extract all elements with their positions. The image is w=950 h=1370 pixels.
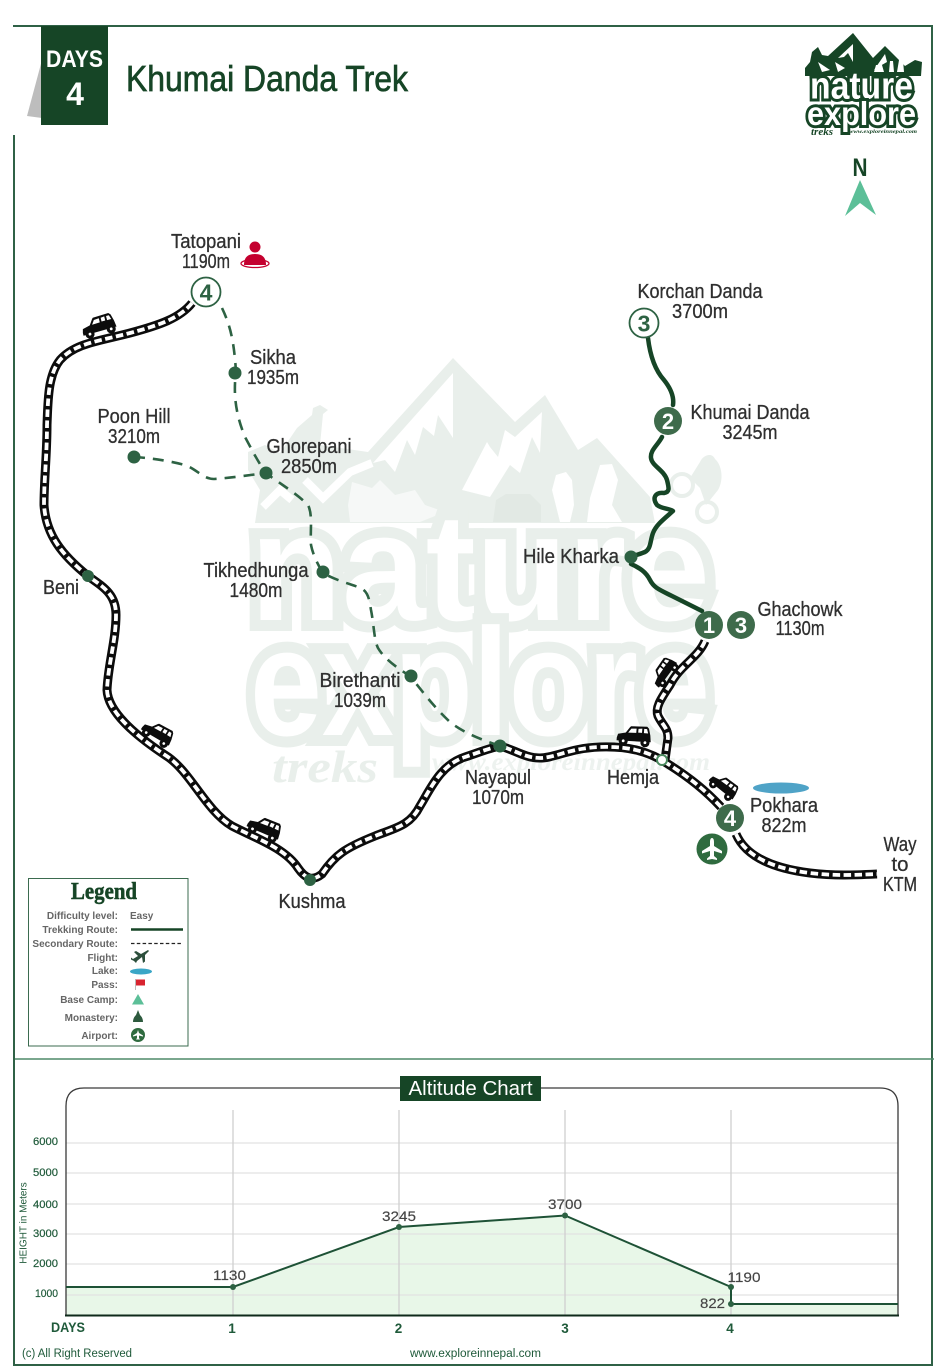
- y axis labels: 4000: [33, 1199, 58, 1211]
- x axis labels: 2: [395, 1321, 402, 1336]
- logo: nature explore treks: explore: [807, 95, 916, 132]
- place labels: KTM: [883, 874, 917, 896]
- place labels: 3245m: [722, 422, 778, 444]
- place labels: Sikha: [250, 347, 297, 369]
- value labels: 1130: [213, 1267, 246, 1283]
- legend labels: Lake:: [92, 966, 118, 977]
- legend value: easy: Easy: [130, 911, 154, 922]
- y axis title: HEIGHT in Meters: [18, 1182, 30, 1264]
- legend: secondary line: [131, 942, 181, 944]
- chart heading: Altitude Chart: [408, 1078, 533, 1100]
- marker: Ghachowk 1: 1: [703, 613, 715, 638]
- road route: jeep track: [44, 303, 877, 878]
- place labels: Nayapul: [465, 767, 531, 789]
- secondary route: [134, 308, 500, 746]
- legend labels: Pass:: [91, 980, 118, 991]
- legend icon: monastery: [133, 1010, 143, 1022]
- watermark: nature explore logo: [248, 358, 722, 792]
- watermark: nature explore logo: treks: [272, 741, 378, 792]
- marker: Ghachowk 3: 3: [735, 613, 747, 638]
- y axis labels: 6000: [33, 1136, 58, 1148]
- legend icon: base camp: [132, 994, 144, 1004]
- icon: base person at Tatopani: [241, 242, 269, 268]
- place labels: Birethanti: [320, 670, 400, 692]
- marker: Korchan Danda 3: [630, 308, 658, 338]
- place labels: to: [892, 854, 908, 876]
- x axis labels: [51, 1320, 734, 1336]
- marker: Hemja: [657, 755, 667, 765]
- y axis labels: 3000: [33, 1228, 58, 1240]
- place labels: Pokhara: [750, 795, 819, 817]
- value labels: 3700: [548, 1196, 582, 1212]
- place labels: Khumai Danda: [690, 402, 810, 424]
- icon: airport: [696, 834, 728, 864]
- x axis labels: 1: [228, 1321, 236, 1336]
- legend icon: airport: [131, 1028, 145, 1042]
- north arrow: [845, 154, 876, 216]
- marker: Ghachowk 3: [727, 611, 755, 639]
- legend labels: Monastery:: [65, 1013, 118, 1024]
- place labels: Ghachowk: [758, 599, 843, 621]
- legend labels: Base Camp:: [60, 995, 118, 1006]
- watermark: nature explore logo: explore: [250, 597, 710, 768]
- watermark: nature explore logo: nature: [250, 482, 710, 653]
- place labels: Tatopani: [171, 231, 241, 253]
- marker: Korchan Danda 3: 3: [638, 310, 650, 336]
- stop markers: [82, 278, 755, 886]
- place labels: 3700m: [672, 301, 728, 323]
- value labels: 3245: [382, 1208, 416, 1224]
- marker: Pokhara 4: 4: [724, 806, 737, 831]
- legend heading: Legend: [71, 879, 138, 905]
- place labels: 3210m: [108, 426, 160, 448]
- marker: Khumai Danda 2: [654, 407, 682, 435]
- x axis labels: DAYS: [51, 1320, 85, 1335]
- x axis labels: 4: [726, 1321, 734, 1336]
- footer: website: www.exploreinnepal.com: [409, 1348, 541, 1360]
- watermark: nature explore logo: www.exploreinnepal.com: [432, 749, 710, 776]
- place labels: Hemja: [607, 767, 660, 789]
- y axis labels: 5000: [33, 1167, 58, 1179]
- marker: Tatopani 4: 4: [200, 280, 213, 306]
- panel: legend: [28, 878, 188, 1046]
- marker: Tatopani 4: [192, 278, 220, 306]
- north arrow: N: [852, 154, 868, 182]
- place labels: Hile Kharka: [523, 546, 620, 568]
- trekking route: [631, 338, 702, 611]
- value labels: [213, 1196, 761, 1311]
- place labels: Ghorepani: [266, 436, 352, 458]
- legend icon: flight: [131, 950, 149, 963]
- value labels: 822: [700, 1295, 725, 1311]
- legend labels: Flight:: [87, 953, 118, 964]
- place labels: 1070m: [472, 787, 524, 809]
- logo: nature explore treks: nature: [810, 66, 913, 108]
- place labels: 1130m: [776, 618, 824, 640]
- logo: nature explore treks: [805, 33, 922, 138]
- title: Khumai Danda Trek: [126, 58, 409, 99]
- legend labels: Airport:: [81, 1031, 118, 1042]
- marker: Khumai Danda 2: 2: [662, 409, 674, 434]
- baseline axis: [65, 1314, 899, 1316]
- place labels: 2850m: [281, 456, 337, 478]
- place labels: 1190m: [182, 251, 230, 273]
- y axis labels: 2000: [33, 1258, 58, 1270]
- legend labels: [32, 911, 118, 1042]
- marker: Pokhara 4: [716, 804, 744, 832]
- place labels: 1935m: [247, 367, 299, 389]
- legend labels: Difficulty level:: [47, 911, 118, 922]
- y axis labels: 1000: [35, 1288, 58, 1300]
- area under altitude line: [66, 1216, 898, 1315]
- panel: altitude chart: [18, 1076, 899, 1336]
- legend labels: Secondary Route:: [32, 939, 118, 950]
- altitude line: [66, 1216, 898, 1304]
- logo: nature explore treks: treks: [811, 126, 833, 138]
- legend labels: Trekking Route:: [42, 925, 118, 936]
- marker: Ghachowk 1: [695, 611, 723, 639]
- jeep icons: [80, 312, 741, 845]
- place labels: 822m: [762, 815, 806, 837]
- value labels: 1190: [728, 1269, 761, 1285]
- place labels: 1480m: [230, 580, 282, 602]
- place labels: Poon Hill: [98, 406, 170, 428]
- place labels: Beni: [43, 577, 79, 599]
- icon: lake at Pokhara: [753, 782, 809, 794]
- place labels: 1039m: [334, 690, 386, 712]
- days badge: 4: [66, 76, 84, 112]
- days badge: [27, 26, 108, 125]
- data points: [230, 1212, 734, 1307]
- footer: copyright: (c) All Right Reserved: [22, 1348, 132, 1360]
- legend icon: pass flag: [136, 979, 145, 990]
- x axis labels: 3: [561, 1321, 569, 1336]
- place labels: Tikhedhunga: [204, 560, 309, 582]
- grid lines: [66, 1110, 898, 1315]
- legend icon: lake: [130, 968, 152, 974]
- days badge: DAYS: [46, 46, 103, 73]
- place labels: Way: [884, 834, 916, 856]
- place labels: Kushma: [278, 891, 346, 913]
- legend: trekking line: [131, 928, 183, 931]
- place labels: Korchan Danda: [638, 281, 763, 303]
- logo: nature explore treks: www.exploreinnepal.com: [849, 129, 918, 135]
- dots: [82, 366, 638, 886]
- place labels: [43, 231, 917, 913]
- y axis labels: [33, 1136, 58, 1300]
- chart border: [66, 1088, 898, 1315]
